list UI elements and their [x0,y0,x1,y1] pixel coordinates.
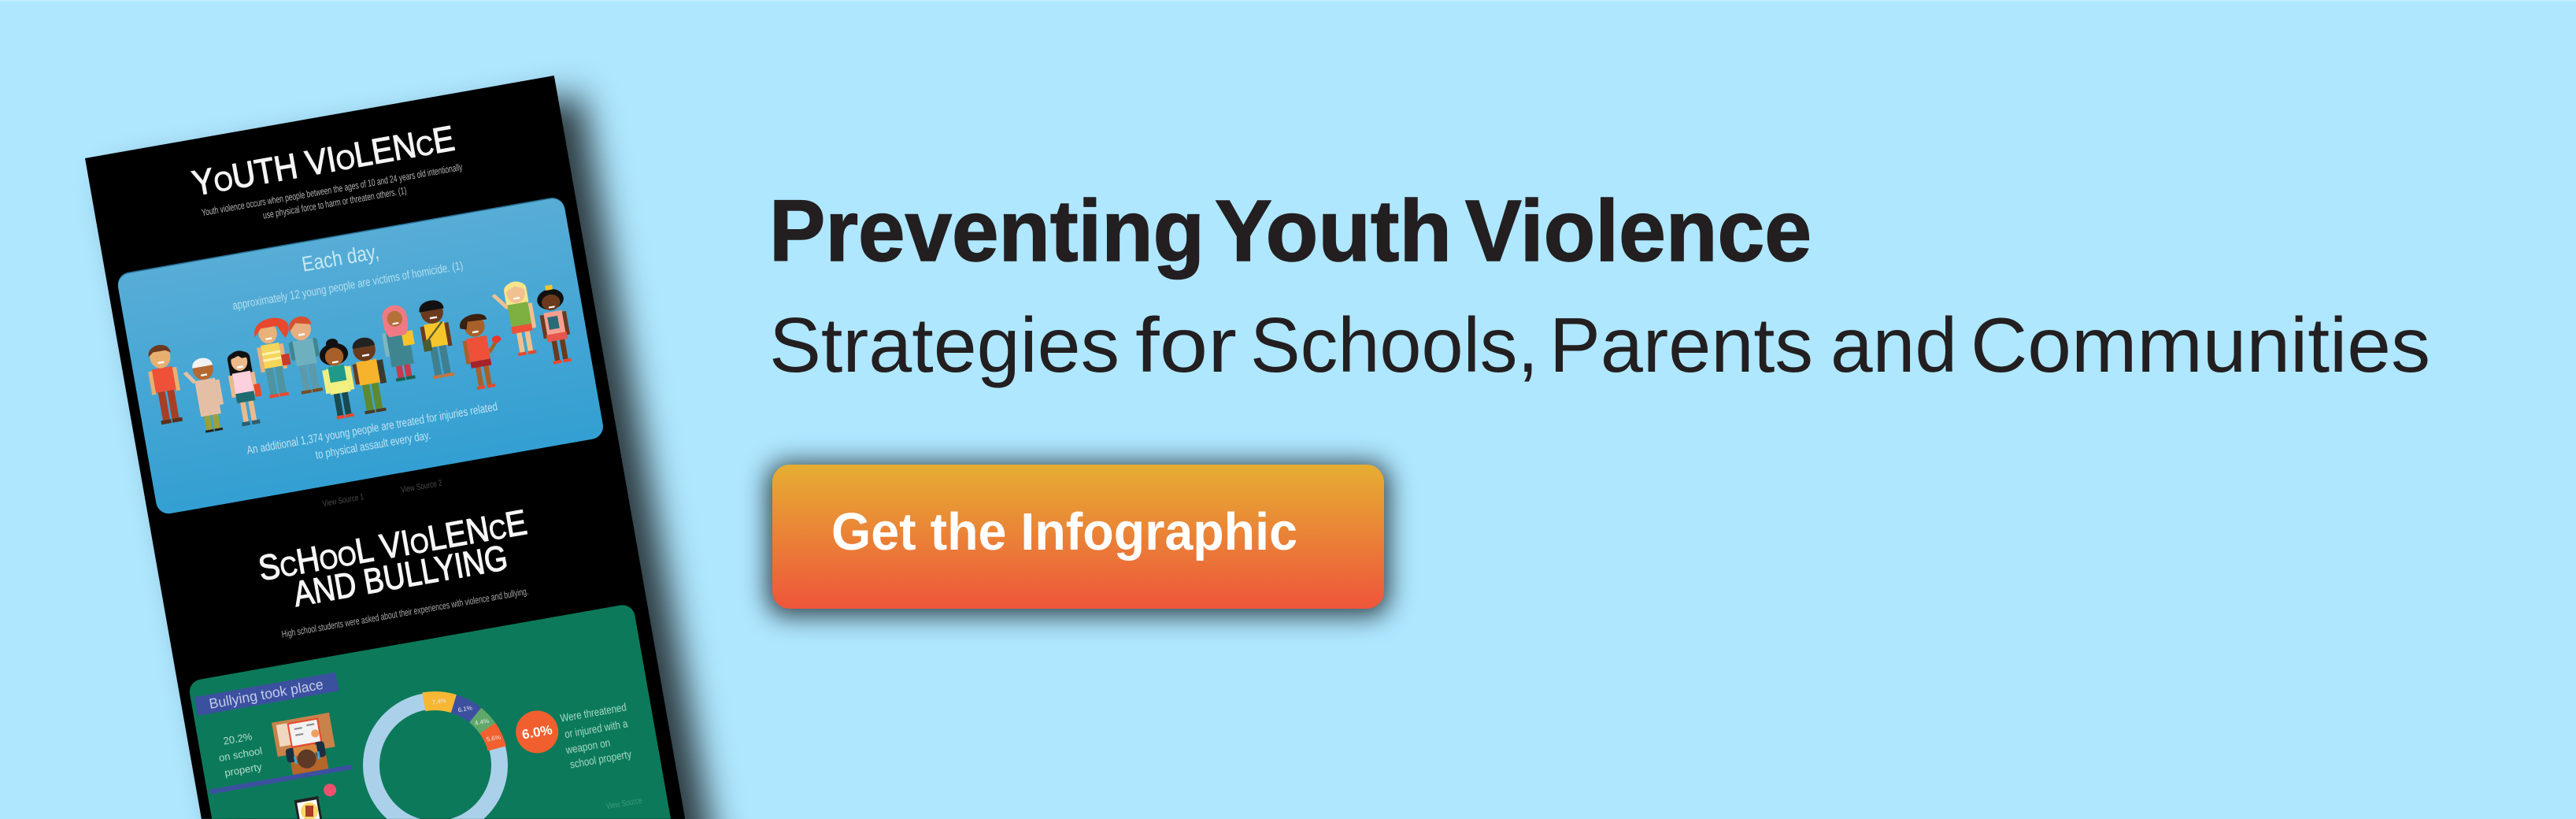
heading: school violence and bullying: AND BULLYING [291,537,510,614]
heading: youth violence: YOUTH VIOLENCE [189,118,457,203]
subtitle [769,302,2430,388]
character: boy with satchel [416,298,457,380]
character: boy in white cap [183,356,228,435]
black page background [85,76,685,819]
character: girl in red dress with apple [458,310,509,391]
panel heading: Each day, [300,239,381,276]
title: Youth [1215,183,1452,280]
button label: Get the Infographic [831,502,1297,561]
callout: weapon threats 6.0%: school property [569,747,632,771]
intro text: Youth violence occurs when people between the ages of 10 and 24 years old intentionally [201,161,464,218]
homicide statistic: approximately 12 young people are victims of homicide. (1) [231,259,464,313]
title: Violence [1465,183,1812,280]
icon: student at desk [272,713,339,777]
button body [772,465,1384,609]
treated injuries statistic: to physical assault every day. [315,428,431,462]
character: girl with long black hair [224,348,266,428]
donut chart [363,688,508,819]
on school property statistic: property [224,761,263,779]
blue panel edge [116,195,605,516]
character: boy in yellow shirt [348,335,391,415]
source links: View Source 2 [400,479,443,495]
callout: weapon threats 6.0% [513,695,635,779]
callout: weapon threats 6.0%: Were threatened [559,700,627,724]
on school property statistic [215,729,266,780]
character: girl with red hair and striped top [252,316,300,399]
treated injuries statistic: An additional 1,374 young people are treated for injuries related [246,400,498,458]
button: get the infographic [768,463,1389,616]
heading: school violence and bullying: SCHOOL VIOLENCE [255,502,530,588]
icon: phone with message bubble [294,784,336,819]
callout: weapon threats 6.0%: or injured with a [564,717,629,740]
source links: View Source 1 [322,492,365,509]
treated injuries statistic [246,400,502,473]
intro text: use physical force to harm or threaten others. (1) [262,185,407,221]
character: girl in pink top with book [535,283,575,365]
callout: weapon threats 6.0%: 6.0% [521,722,553,743]
group of young people [142,268,578,450]
donut chart: 4.4% [474,717,490,727]
upper page content [99,101,630,658]
source links [322,479,443,509]
on school property statistic: on school [218,744,263,764]
infographic preview: tilted page [85,76,685,819]
character: blonde girl waving [491,280,541,358]
character: girl in hijab [377,303,420,383]
subtitle: Communities [1971,302,2430,388]
title [769,183,1812,280]
view source link: View Source [605,796,642,811]
green panel background [190,605,671,819]
donut chart: 5.6% [486,734,502,743]
subtitle: for [1135,302,1237,388]
donut chart: 6.1% [457,704,473,713]
character: boy in red shirt [144,343,186,425]
panel: each day [116,195,605,516]
subtitle: Strategies [769,302,1120,388]
character: girl with top knot and scarf [317,336,359,421]
panel: bullying [190,605,671,819]
section intro text: High school students were asked about their experiences with violence and bullying. [281,586,529,640]
character: boy with red hair and backpack [284,314,326,395]
label: bullying took place [194,673,339,716]
divider bar [209,765,353,795]
label: bullying took place: Bullying took place [208,676,324,712]
donut chart: 7.4% [431,697,446,706]
subtitle: Parents [1549,302,1813,388]
on school property statistic: 20.2% [222,730,254,747]
blue panel background [116,197,605,516]
callout: weapon threats 6.0%: weapon on [564,736,611,756]
intro text [201,161,466,232]
subtitle: Schools, [1250,302,1538,388]
subtitle: and [1830,302,1957,388]
title: Preventing [769,183,1205,280]
button shadow [768,463,1389,616]
